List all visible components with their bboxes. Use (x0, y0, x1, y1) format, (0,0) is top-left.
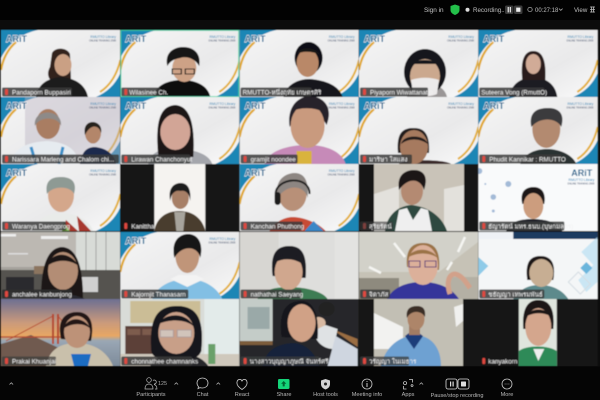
top bar (0, 0, 600, 30)
person (152, 234, 222, 299)
person (519, 300, 557, 366)
tile: RMUTTO participant: RMUTTO Library (329, 35, 355, 39)
name label: Kanchan Phuthong (251, 224, 305, 230)
tile: Phudit Kannikar : RMUTTO: RMUTTO Library (568, 102, 594, 106)
name label: Prakai Khuanjai (12, 358, 56, 366)
bottom toolbar (0, 366, 600, 400)
tile: Kanchan Phuthong: RMUTTO Library (329, 169, 355, 173)
participants button: Participants (136, 392, 166, 398)
tile: gramjit noondee (238, 96, 360, 165)
ARiT logo (567, 168, 595, 186)
tile: Thai-named participant (358, 96, 480, 165)
tile: Thai-named man in blue shirt (359, 298, 478, 366)
tile: Kanittha (120, 163, 238, 232)
tile: anchalee kanbunjong (0, 231, 121, 300)
meeting info button: Meeting info (352, 392, 382, 398)
name label: anchalee kanbunjong (12, 292, 72, 298)
tile: gramjit noondee: ONLINE TRAINING 2568 (328, 106, 355, 110)
tile: Suteera Vong (RmuttO): ARiT (483, 34, 505, 44)
tile: Phudit Kannikar : RMUTTO (478, 96, 599, 164)
tile: Piyaporn Wiwattanatip (358, 29, 480, 98)
tile: Waranya Daengprog: ARiT (6, 168, 27, 178)
person (258, 246, 328, 299)
apps button: Apps (402, 392, 415, 398)
name label: nathathai Saeyang (251, 292, 304, 298)
ARiT logo: RMUTTO Library (569, 178, 595, 182)
tile: Narissara Marleng and Chalom: ONLINE TRAINING 2568 (89, 106, 117, 110)
tile: Narissara Marleng and Chalom (0, 96, 121, 165)
tile: gramjit noondee: ARiT (245, 101, 266, 111)
bridge (1, 314, 71, 344)
tile: slide with hexagon pattern (477, 163, 599, 232)
tile: Prakai Khuanjai with bridge background (0, 298, 121, 366)
name label: วรัญญา ในเมธาร (369, 358, 417, 366)
tile: Thai-named woman with apron (360, 163, 477, 232)
chat button (197, 378, 220, 398)
tile: Pandaporn Buppasiri: ONLINE TRAINING 2568 (89, 40, 117, 42)
tile: Wilasinee Ch. (active speaker): ONLINE TRAINING 2568 (208, 40, 236, 42)
tile: Thai-named participant: ONLINE TRAINING 2568 (447, 106, 475, 110)
tile: Phudit Kannikar : RMUTTO: ONLINE TRAINING 2568 (566, 106, 594, 110)
host tools button: Host tools (313, 392, 338, 398)
person (284, 42, 343, 97)
name label: kanyakorn (488, 358, 518, 366)
share button: Share (277, 392, 291, 398)
tile: Piyaporn Wiwattanatip: ARiT (364, 34, 385, 44)
hexagon pattern (476, 168, 511, 212)
name label: Lirawan Chanchonyut (131, 156, 192, 164)
tile: Suteera Vong (RmuttO) (478, 29, 599, 98)
chat button: Chat (197, 392, 209, 398)
name label: นางสาวบุญญาภูษณี จันทร์ศรี (250, 358, 329, 366)
meeting info button (352, 379, 382, 398)
view menu (574, 6, 595, 14)
tile: RMUTTO participant (238, 29, 360, 98)
person (404, 49, 447, 97)
person (520, 108, 576, 164)
person (36, 49, 88, 97)
tile: Pandaporn Buppasiri: ARiT (6, 34, 27, 44)
tile: Suteera Vong (RmuttO): ONLINE TRAINING 2568 (566, 40, 594, 42)
person (506, 187, 562, 231)
person (263, 301, 320, 366)
tile: Waranya Daengprog: ONLINE TRAINING 2568 (89, 174, 117, 176)
person (265, 96, 346, 164)
recording pause and stop buttons (505, 6, 522, 14)
person (509, 51, 557, 97)
name label: Phudit Kannikar : RMUTTO (489, 156, 566, 164)
tile: Kanchan Phuthong: ARiT (245, 168, 266, 178)
active speaker outline (121, 30, 239, 97)
name label: จิดาภัส (369, 290, 388, 298)
tile: Phudit Kannikar : RMUTTO: ARiT (483, 101, 505, 111)
more button (501, 379, 513, 398)
tile: Narissara Marleng and Chalom: ARiT (6, 101, 27, 111)
tile: kanyakorn (478, 298, 598, 366)
tile: Lirawan Chanchonyut (120, 96, 240, 165)
second person (312, 302, 358, 366)
tile: Kajornjit Thanasarn: ONLINE TRAINING 2568 (208, 242, 236, 244)
tile: Thai-named woman with purple glasses (358, 231, 479, 300)
host tools button (313, 379, 338, 398)
tile: Waranya Daengprog: RMUTTO Library (90, 169, 116, 173)
tile: Kanchan Phuthong: ONLINE TRAINING 2568 (328, 174, 355, 176)
tile: Kajornjit Thanasarn: RMUTTO Library (210, 237, 236, 241)
tile: Wilasinee Ch. (active speaker): RMUTTO Library (210, 35, 236, 39)
react button: React (235, 392, 250, 398)
name label: Kanittha (131, 224, 155, 230)
meeting timer (528, 7, 563, 14)
tile: Wilasinee Ch. (active speaker): ARiT (125, 34, 147, 44)
tile: chonnathee chamnanks (120, 298, 240, 366)
more button: More (501, 392, 513, 398)
tile: Suteera Vong (RmuttO): RMUTTO Library (568, 35, 594, 39)
audio caret (10, 383, 13, 384)
view menu: View (574, 7, 588, 14)
tile: Waranya Daengprog (0, 163, 121, 232)
person (46, 312, 113, 366)
name label: gramjit noondee (251, 156, 296, 164)
name label: Narissara Marleng and Chalom chi... (12, 156, 114, 164)
tile: Kajornjit Thanasarn: ARiT (125, 236, 147, 246)
two people (11, 109, 116, 164)
person (153, 47, 210, 97)
react button (235, 379, 250, 398)
person (34, 177, 93, 231)
tile: Lirawan Chanchonyut: ONLINE TRAINING 2568 (208, 106, 236, 110)
participants button (136, 378, 178, 398)
ARiT logo: ARiT (571, 168, 593, 178)
name label: chonnathee chamnanks (131, 358, 198, 366)
person (154, 183, 205, 231)
person (150, 306, 208, 366)
person (270, 173, 326, 231)
name label: ชธัญญา เทพรมพันธ์ (488, 290, 543, 298)
name label: RMUTTO-หนึ่งฤทัย เกษตรศิริ (243, 88, 322, 96)
recording indicator: Recording... (473, 7, 507, 14)
name label: Kajornjit Thanasarn (131, 292, 186, 298)
tile: Piyaporn Wiwattanatip: RMUTTO Library (448, 35, 474, 39)
tile: Kajornjit Thanasarn (120, 231, 240, 300)
icon: green security shield (450, 4, 460, 15)
pause and stop recording button: Pause/stop recording (431, 393, 483, 399)
tile: Narissara Marleng and Chalom: RMUTTO Library (90, 102, 116, 106)
tile: slide with banner (478, 231, 599, 300)
name label: Waranya Daengprog (12, 224, 70, 230)
participants button: 125 (158, 381, 167, 387)
tile: RMUTTO participant: ONLINE TRAINING 2568 (328, 40, 355, 42)
name label: Piyaporn Wiwattanatip (370, 90, 433, 96)
tile: Thai-named participant: ARiT (364, 101, 385, 111)
tile: Thai-named participant: RMUTTO Library (448, 102, 474, 106)
tile: Kanchan Phuthong (238, 163, 360, 232)
person (41, 247, 85, 299)
name label: Pandaporn Buppasiri (12, 90, 71, 96)
person (148, 105, 212, 164)
meeting timer: 00:27:18 (535, 8, 559, 14)
tile: nathathai Saeyang (238, 231, 360, 300)
person (385, 170, 447, 231)
tile: Piyaporn Wiwattanatip: ONLINE TRAINING 2568 (447, 40, 475, 42)
ARiT logo: ONLINE TRAINING 2568 (567, 182, 595, 186)
tile: gramjit noondee: RMUTTO Library (329, 102, 355, 106)
tile: RMUTTO participant: ARiT (245, 34, 266, 44)
tile: Pandaporn Buppasiri: RMUTTO Library (90, 35, 116, 39)
tile: Thai-named woman in room (239, 298, 359, 366)
name label: Suteera Vong (RmuttO) (481, 90, 547, 96)
tile: Lirawan Chanchonyut: RMUTTO Library (210, 102, 236, 106)
name label: สุริยรัตน์ (369, 222, 392, 230)
tile: Pandaporn Buppasiri (0, 29, 121, 98)
name label: Wilasinee Ch. (129, 90, 168, 96)
name label: ธัญารัตน์ มทร.ธนบ.(บุษกมลกร) (488, 222, 573, 230)
person (513, 256, 568, 299)
share button (277, 379, 291, 398)
person (398, 128, 451, 164)
name label: มาริษา ใสแสง (369, 156, 407, 164)
tile: Lirawan Chanchonyut: ARiT (125, 101, 147, 111)
apps button (402, 380, 423, 398)
person (387, 243, 470, 299)
pause and stop recording button (431, 379, 483, 399)
person (381, 306, 441, 366)
sign in link: Sign in (424, 7, 444, 14)
tile: Wilasinee Ch. (active speaker) (120, 29, 240, 98)
